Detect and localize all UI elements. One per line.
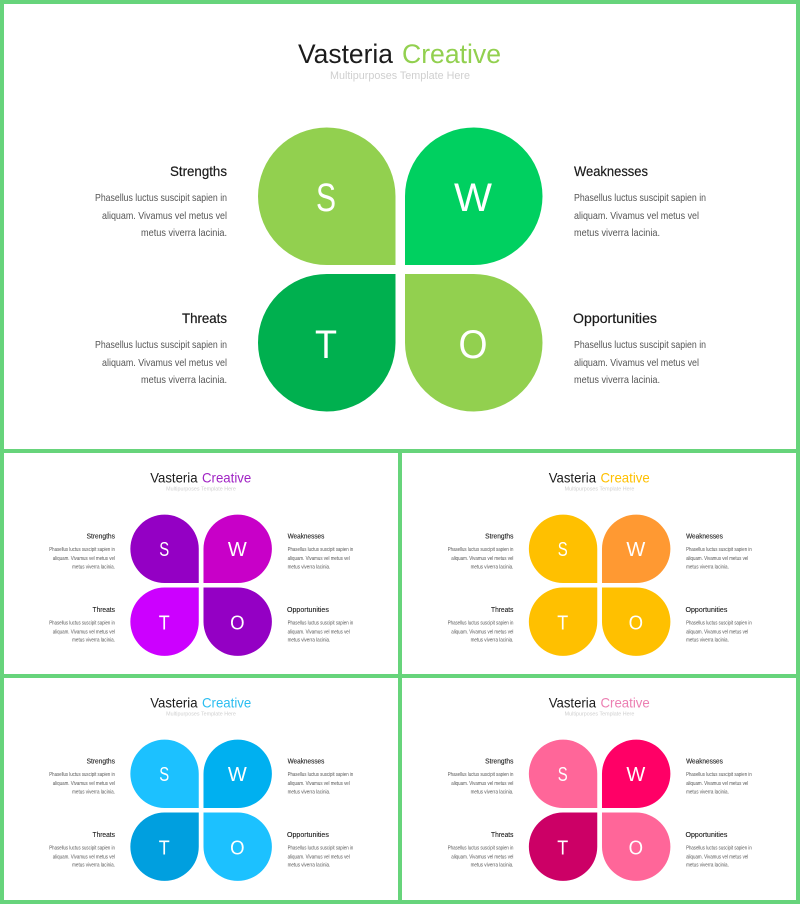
text block: strengths <box>95 163 227 239</box>
text block: strengths: metus viverra lacinia. <box>471 565 513 571</box>
text block: strengths: metus viverra lacinia. <box>72 565 115 571</box>
text block: threats: aliquam. Vivamus vel metus vel <box>451 629 513 635</box>
text block: weaknesses: Weaknesses <box>686 759 723 766</box>
petal: S <box>130 740 199 808</box>
petal: W: W <box>626 764 645 786</box>
text block: threats: metus viverra lacinia. <box>72 638 115 644</box>
text block: strengths: aliquam. Vivamus vel metus vel <box>53 556 115 562</box>
text block: opportunities: Phasellus luctus suscipit sapien in <box>686 845 752 851</box>
text block: strengths: Phasellus luctus suscipit sapien in <box>49 547 115 553</box>
petal: S <box>130 515 199 583</box>
text block: weaknesses: Phasellus luctus suscipit sapien in <box>574 192 706 204</box>
petal: O <box>405 274 542 411</box>
text block: strengths: Phasellus luctus suscipit sapien in <box>95 192 227 204</box>
text block: weaknesses: Weaknesses <box>288 759 325 766</box>
text block: threats: aliquam. Vivamus vel metus vel <box>451 854 513 860</box>
text block: threats: Threats <box>93 607 115 614</box>
text block: opportunities: Phasellus luctus suscipit sapien in <box>288 620 353 626</box>
petal: W: W <box>626 539 645 561</box>
petal: O: O <box>458 323 488 367</box>
text block: opportunities: aliquam. Vivamus vel metus vel <box>574 357 699 369</box>
text block: threats: metus viverra lacinia. <box>471 863 513 869</box>
panel: pink SWOT <box>402 678 796 900</box>
title: Vasteria <box>150 471 198 486</box>
text block: weaknesses: Weaknesses <box>288 534 325 541</box>
text block: weaknesses: metus viverra lacinia. <box>686 565 729 571</box>
petal: W <box>602 515 670 583</box>
text block: weaknesses: metus viverra lacinia. <box>574 227 660 239</box>
title: Vasteria <box>298 39 394 69</box>
text block: strengths: Strengths <box>485 534 514 541</box>
petal: S: S <box>316 176 336 220</box>
text block: strengths <box>448 759 514 796</box>
petal: W <box>203 515 272 583</box>
text block: weaknesses: aliquam. Vivamus vel metus vel <box>686 781 748 787</box>
petal: T: T <box>557 612 568 634</box>
petal: T: T <box>315 323 337 367</box>
petal: O <box>203 813 272 881</box>
text block: threats <box>95 310 227 386</box>
text block: threats: aliquam. Vivamus vel metus vel <box>102 357 227 369</box>
text block: weaknesses: Phasellus luctus suscipit sapien in <box>686 772 752 778</box>
petal: W <box>203 740 272 808</box>
title: Creative <box>600 696 650 711</box>
text block: opportunities: aliquam. Vivamus vel metus vel <box>686 629 748 635</box>
petal: T <box>529 588 597 656</box>
title: Vasteria <box>150 696 198 711</box>
petal: W <box>405 128 542 265</box>
text block: strengths: aliquam. Vivamus vel metus vel <box>451 556 513 562</box>
text block: opportunities: Phasellus luctus suscipit sapien in <box>288 845 353 851</box>
title: Vasteria <box>549 471 597 486</box>
text block: weaknesses: metus viverra lacinia. <box>288 790 330 796</box>
text block: strengths: metus viverra lacinia. <box>141 227 227 239</box>
petal: S: S <box>159 764 169 786</box>
text block: weaknesses: Phasellus luctus suscipit sapien in <box>288 547 353 553</box>
petal: W: W <box>228 764 247 786</box>
petal: T <box>130 813 199 881</box>
petal: T <box>130 588 199 656</box>
petal: O: O <box>629 837 643 859</box>
text block: weaknesses <box>686 759 752 796</box>
subtitle: Multipurposes Template Here <box>166 712 236 718</box>
petal: O: O <box>230 837 245 859</box>
petal: S: S <box>159 539 169 561</box>
petal: O: O <box>629 612 643 634</box>
petal: S: S <box>558 764 568 786</box>
text block: threats: aliquam. Vivamus vel metus vel <box>53 629 115 635</box>
title: Creative <box>202 696 251 711</box>
text block: strengths <box>448 534 514 571</box>
text block: strengths: metus viverra lacinia. <box>471 790 513 796</box>
text block: strengths <box>49 759 115 796</box>
text block: strengths: Strengths <box>170 163 227 179</box>
text block: opportunities: metus viverra lacinia. <box>288 638 330 644</box>
title: Vasteria <box>549 696 597 711</box>
text block: opportunities: metus viverra lacinia. <box>288 863 330 869</box>
text block: strengths <box>49 534 115 571</box>
text block: strengths: aliquam. Vivamus vel metus vel <box>451 781 513 787</box>
text block: threats: metus viverra lacinia. <box>72 863 115 869</box>
text block: opportunities <box>287 607 353 644</box>
petal: W <box>602 740 670 808</box>
text block: strengths: Phasellus luctus suscipit sapien in <box>49 772 115 778</box>
text block: threats: metus viverra lacinia. <box>141 374 227 386</box>
text block: threats: Threats <box>491 607 514 614</box>
text block: strengths: Phasellus luctus suscipit sapien in <box>448 547 514 553</box>
text block: opportunities <box>686 607 752 644</box>
title <box>549 696 650 711</box>
petal: O <box>602 588 670 656</box>
title: Creative <box>202 471 251 486</box>
text block: threats: Threats <box>93 832 115 839</box>
text block: weaknesses: aliquam. Vivamus vel metus vel <box>288 781 350 787</box>
text block: strengths: Strengths <box>87 534 115 541</box>
text block: opportunities: Phasellus luctus suscipit sapien in <box>686 620 752 626</box>
text block: weaknesses: aliquam. Vivamus vel metus vel <box>288 556 350 562</box>
title: Creative <box>600 471 650 486</box>
text block: threats: Phasellus luctus suscipit sapien in <box>448 620 514 626</box>
text block: threats: Phasellus luctus suscipit sapien in <box>448 845 514 851</box>
text block: strengths: aliquam. Vivamus vel metus vel <box>53 781 115 787</box>
text block: weaknesses: metus viverra lacinia. <box>288 565 330 571</box>
petal: S <box>529 740 597 808</box>
petal: S: S <box>558 539 568 561</box>
petal: T: T <box>159 837 170 859</box>
petal: T <box>529 813 597 881</box>
text block: strengths: aliquam. Vivamus vel metus vel <box>102 210 227 222</box>
title: Creative <box>402 39 501 69</box>
text block: opportunities: aliquam. Vivamus vel metus vel <box>288 629 350 635</box>
text block: weaknesses: metus viverra lacinia. <box>686 790 729 796</box>
text block: opportunities: aliquam. Vivamus vel metus vel <box>288 854 350 860</box>
text block: weaknesses: aliquam. Vivamus vel metus vel <box>574 210 699 222</box>
petal: O: O <box>230 612 245 634</box>
text block: opportunities: Opportunities <box>686 607 728 614</box>
text block: opportunities: Phasellus luctus suscipit sapien in <box>574 339 706 351</box>
text block: opportunities: Opportunities <box>573 310 657 326</box>
text block: threats <box>49 832 115 869</box>
title <box>150 471 251 486</box>
petal: O <box>602 813 670 881</box>
text block: opportunities: metus viverra lacinia. <box>686 863 729 869</box>
panel: blue SWOT <box>4 678 398 900</box>
text block: threats <box>448 832 514 869</box>
text block: weaknesses: Weaknesses <box>686 534 723 541</box>
text block: weaknesses <box>288 534 353 571</box>
petal: T <box>258 274 396 411</box>
text block: weaknesses: aliquam. Vivamus vel metus vel <box>686 556 748 562</box>
text block: weaknesses <box>288 759 353 796</box>
petal: W: W <box>454 176 492 220</box>
panel: yellow SWOT <box>402 453 796 674</box>
text block: threats <box>448 607 514 644</box>
text block: opportunities: metus viverra lacinia. <box>574 374 660 386</box>
petal: S <box>258 128 396 265</box>
text block: weaknesses <box>686 534 752 571</box>
petal: O <box>203 588 272 656</box>
text block: strengths: metus viverra lacinia. <box>72 790 115 796</box>
title <box>549 471 650 486</box>
subtitle: Multipurposes Template Here <box>330 70 470 82</box>
text block: weaknesses: Weaknesses <box>574 163 648 179</box>
title <box>150 696 251 711</box>
subtitle: Multipurposes Template Here <box>166 487 236 493</box>
text block: opportunities: metus viverra lacinia. <box>686 638 729 644</box>
petal: S <box>529 515 597 583</box>
text block: threats <box>49 607 115 644</box>
subtitle: Multipurposes Template Here <box>565 487 634 493</box>
text block: threats: aliquam. Vivamus vel metus vel <box>53 854 115 860</box>
text block: threats: Threats <box>182 310 227 326</box>
text block: threats: Phasellus luctus suscipit sapien in <box>49 620 115 626</box>
title <box>298 39 501 69</box>
text block: strengths: Phasellus luctus suscipit sapien in <box>448 772 514 778</box>
petal: T: T <box>557 837 568 859</box>
petal: W: W <box>228 539 247 561</box>
panel: green SWOT <box>4 4 796 449</box>
text block: strengths: Strengths <box>485 759 514 766</box>
text block: opportunities <box>287 832 353 869</box>
text block: strengths: Strengths <box>87 759 115 766</box>
text block: threats: metus viverra lacinia. <box>471 638 513 644</box>
text block: weaknesses: Phasellus luctus suscipit sapien in <box>686 547 752 553</box>
text block: weaknesses: Phasellus luctus suscipit sapien in <box>288 772 353 778</box>
text block: threats: Phasellus luctus suscipit sapien in <box>49 845 115 851</box>
text block: opportunities: Opportunities <box>287 607 329 614</box>
text block: opportunities: Opportunities <box>287 832 329 839</box>
text block: opportunities <box>573 310 706 386</box>
panel: purple SWOT <box>4 453 398 674</box>
text block: opportunities: aliquam. Vivamus vel metus vel <box>686 854 748 860</box>
text block: threats: Phasellus luctus suscipit sapien in <box>95 339 227 351</box>
text block: weaknesses <box>574 163 706 239</box>
text block: opportunities: Opportunities <box>686 832 728 839</box>
petal: T: T <box>159 612 170 634</box>
text block: threats: Threats <box>491 832 514 839</box>
text block: opportunities <box>686 832 752 869</box>
subtitle: Multipurposes Template Here <box>565 712 634 718</box>
